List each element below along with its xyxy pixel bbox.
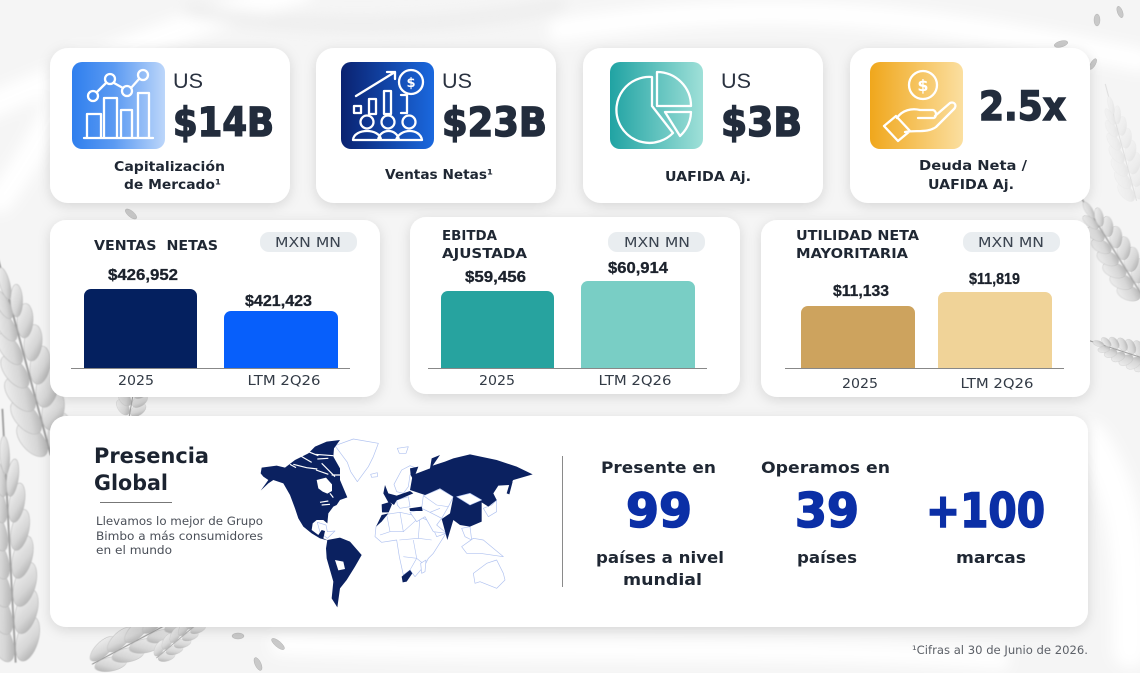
US label: US (173, 70, 203, 93)
bar chart: $426,952 (108, 267, 178, 284)
value: $14B (173, 100, 274, 146)
bar chart: $59,456 (465, 269, 526, 286)
bar chart: LTM 2Q26 (598, 373, 672, 389)
land: north america (261, 440, 347, 541)
bar chart: $11,133 (833, 283, 889, 300)
heading (94, 444, 209, 495)
panel: utilidad neta chart (761, 220, 1090, 397)
stat: 39 countries (761, 458, 890, 567)
bar chart (785, 271, 1064, 392)
stat: 100 brands: marcas (956, 548, 1026, 567)
card: ventas netas (316, 48, 556, 203)
heading: EBITDA (442, 228, 498, 244)
caption: UAFIDA Aj. (665, 169, 751, 185)
caption (114, 159, 225, 193)
bar chart: 2025 (118, 373, 154, 389)
bar chart (428, 260, 707, 389)
bar chart (71, 267, 350, 389)
heading: MAYORITARIA (796, 246, 909, 262)
footnote: ¹Cifras al 30 de Junio de 2026. (912, 643, 1088, 657)
wheat bottom (90, 627, 188, 672)
panel: presencia global (50, 416, 1088, 627)
US label: US (721, 70, 751, 93)
stat: 39 countries: países (797, 548, 857, 567)
stat: 100 brands (926, 484, 1045, 567)
stat: 39 countries: 39 (795, 484, 859, 539)
stat: 99 countries: Presente en (601, 458, 716, 477)
icon: hand with coin (870, 62, 963, 149)
caption: de Mercado¹ (124, 177, 221, 193)
heading: AJUSTADA (442, 246, 528, 262)
bar chart: 2025 (842, 376, 878, 392)
heading: Presencia (94, 444, 209, 468)
icon: growth and people (341, 62, 434, 149)
stat: 39 countries: Operamos en (761, 458, 890, 477)
icon: hand with coin: $ (917, 76, 929, 95)
land: eurasia (410, 454, 533, 540)
heading: Global (94, 471, 168, 495)
unit pill (608, 232, 705, 252)
bar chart: $60,914 (608, 260, 668, 277)
caption: Ventas Netas¹ (385, 167, 493, 183)
unit pill (260, 232, 357, 252)
unit pill (963, 232, 1060, 252)
stat: 100 brands: +100 (926, 484, 1045, 539)
bar chart: $421,423 (245, 293, 312, 310)
land: south america (326, 538, 362, 607)
heading (442, 228, 528, 262)
bar chart: 2025 (479, 373, 515, 389)
stat: 99 countries: 99 (626, 484, 692, 539)
wheat right (1081, 199, 1140, 302)
card: capitalización (50, 48, 290, 203)
caption: UAFIDA Aj. (928, 177, 1014, 193)
caption (919, 158, 1027, 193)
description: en el mundo (96, 543, 172, 557)
bar chart: $11,819 (969, 271, 1020, 288)
card: deuda neta (850, 48, 1090, 203)
value: $23B (442, 100, 547, 146)
panel: ventas netas chart (50, 220, 380, 397)
unit pill: MXN MN (275, 236, 341, 251)
bar chart: LTM 2Q26 (960, 376, 1034, 392)
unit pill: MXN MN (978, 236, 1044, 251)
bar chart: LTM 2Q26 (248, 373, 320, 389)
description: Bimbo a más consumidores (96, 529, 263, 543)
unit pill: MXN MN (624, 236, 690, 251)
caption: Deuda Neta / (919, 158, 1027, 174)
description (96, 514, 263, 557)
world map (261, 439, 533, 607)
stat: 99 countries (596, 458, 724, 589)
card: UAFIDA (583, 48, 823, 203)
US label: US (442, 70, 472, 93)
icon: line and bar chart (72, 62, 165, 149)
heading (796, 228, 920, 262)
stat: 99 countries: mundial (623, 570, 702, 589)
wheat left (0, 260, 68, 458)
value: $3B (721, 100, 802, 146)
panel: EBITDA chart (410, 217, 740, 394)
stat: 99 countries: países a nivel (596, 548, 724, 567)
icon: growth and people: $ (406, 76, 416, 91)
caption: Capitalización (114, 159, 225, 175)
icon: pie chart (610, 62, 703, 149)
value: 2.5x (979, 84, 1066, 130)
description: Llevamos lo mejor de Grupo (96, 514, 263, 528)
heading: VENTAS NETAS (94, 238, 218, 254)
heading: UTILIDAD NETA (796, 228, 920, 244)
